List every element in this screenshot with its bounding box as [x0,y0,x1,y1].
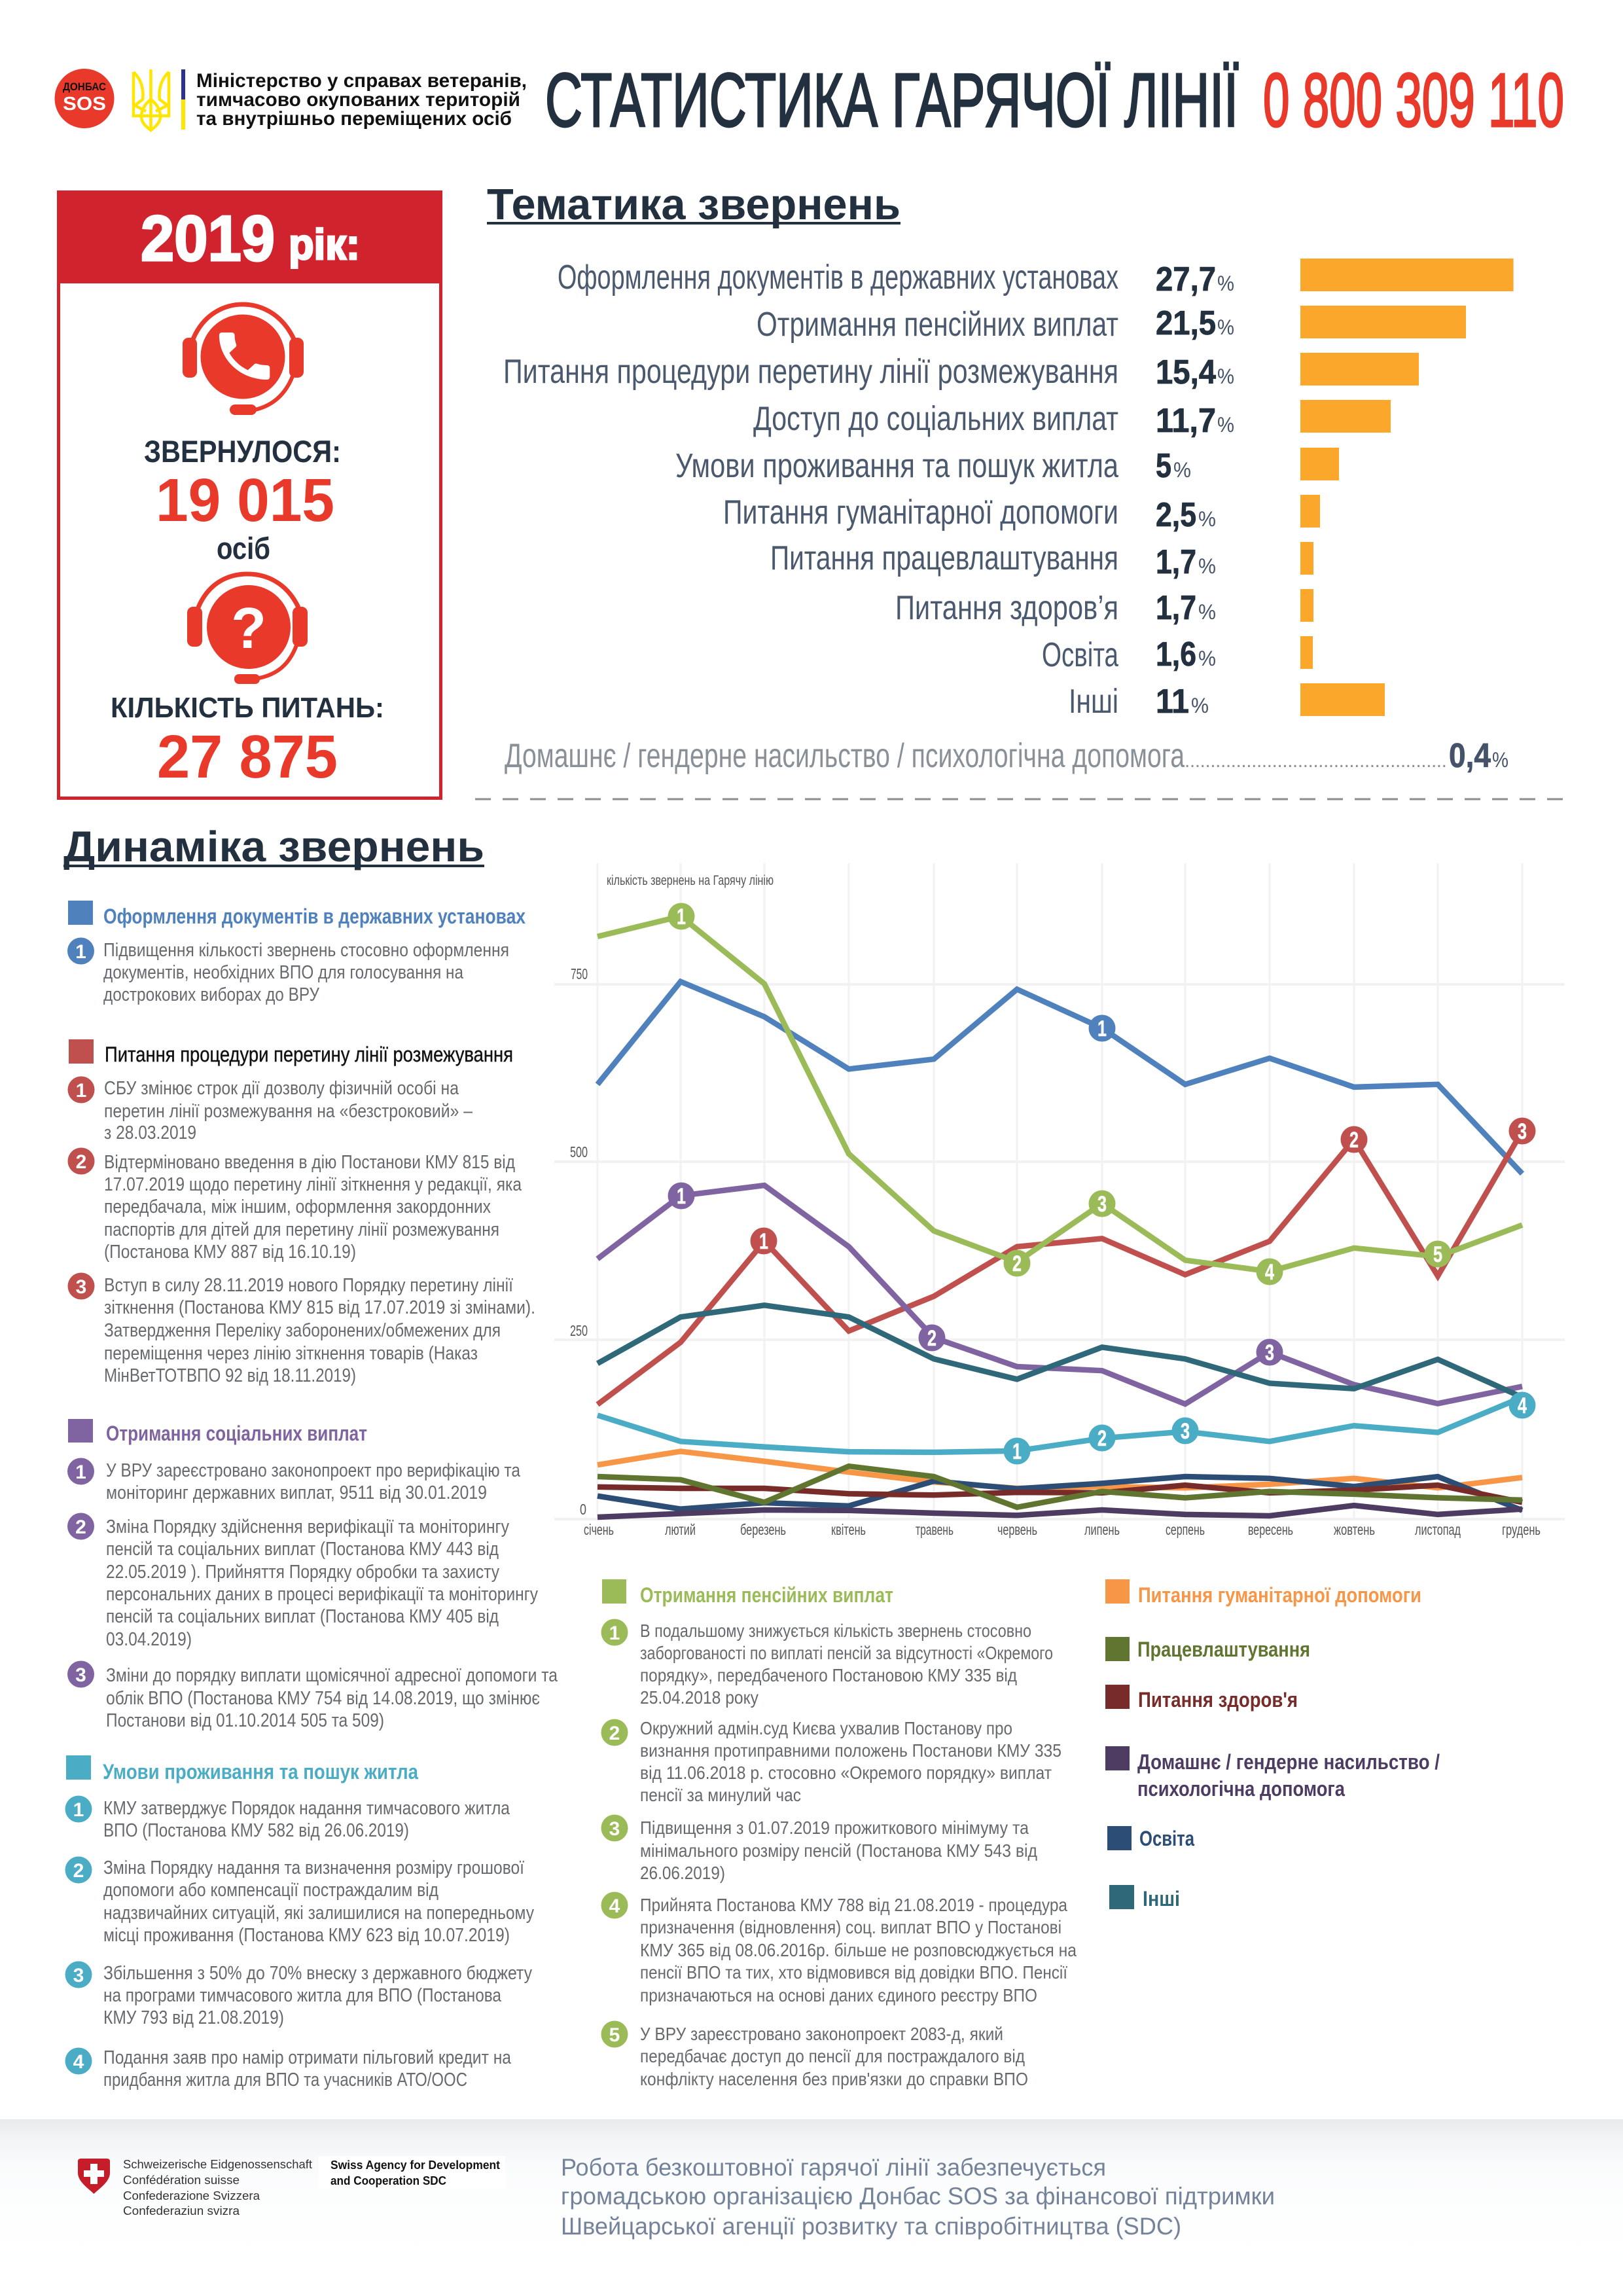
note 2: визнання протиправними положень Постанови КМУ 335 [640,1740,1061,1761]
funding note: Швейцарської агенції розвитку та співробітництва (SDC) [561,2213,1181,2240]
note 4: придбання житла для ВПО та учасників АТО/ООС [103,2070,467,2090]
number: questions: 27 875 [157,723,338,791]
chart markers: 4 [1265,1260,1274,1285]
panel: social payments [67,1419,558,1731]
legend item: health [1105,1685,1298,1712]
note 3 [601,1814,1037,1883]
domestic violence note: 0,4 [1449,737,1491,775]
row 1: % [1217,272,1234,295]
y axis labels: 500 [570,1143,588,1160]
row 2 [757,304,1466,344]
legend item: humanitarian [1105,1579,1421,1607]
row 2: 21,5 [1156,304,1216,342]
row 3: Питання процедури перетину лінії розмежування [503,353,1118,391]
chart markers: 3 [1181,1419,1190,1444]
note 3: мінімального розміру пенсій (Постанова КМУ 543 від [640,1840,1037,1861]
heading: social payments: Отримання соціальних виплат [106,1422,367,1445]
legend item: education [1107,1826,1194,1850]
row 6: % [1198,507,1216,531]
note 2: персональних даних в процесі верифікації та моніторингу [106,1584,538,1605]
icon: Ukrainian trident [134,69,169,130]
note 2: передбачала, між іншим, оформлення закордонних [104,1196,491,1217]
note 2: пенсій та соціальних виплат (Постанова КМУ 443 від [106,1539,499,1560]
ministry name [196,70,527,130]
row 6: 2,5 [1156,496,1196,534]
logo: Donbas SOS: SOS [63,94,106,115]
x axis labels: березень [740,1521,786,1538]
heading: documents: Оформлення документів в державних установах [103,905,526,928]
note 1: ВПО (Постанова КМУ 582 від 26.06.2019) [103,1820,409,1841]
note 1: 25.04.2018 року [640,1687,758,1708]
funding note: громадською організацією Донбас SOS за фінансової підтримки [561,2183,1275,2210]
legend square: crossing [69,1039,94,1064]
y axis labels [570,965,588,1518]
row 5: 5 [1156,447,1171,485]
legend square: documents [68,901,93,925]
note 2: надзвичайних ситуацій, які залишилися на попередньому [103,1903,534,1924]
panel: crossing the line [68,1039,535,1386]
bar chart: topics [503,259,1514,721]
Swiss Confederation text [123,2158,312,2217]
ministry name: Міністерство у справах ветеранів, [196,70,527,92]
note 4: пенсії ВПО та тих, хто відмовився від довідки ВПО. Пенсії [640,1962,1067,1982]
domestic violence note: Домашнє / гендерне насильство / психологічна допомога [505,737,1185,775]
note 1: дострокових виборах до ВРУ [103,984,319,1005]
note 2: Зміна Порядку надання та визначення розміру грошової [103,1857,524,1878]
row 9 [1042,636,1313,674]
number: people: 19 015 [156,466,334,534]
x axis labels: квітень [831,1521,866,1538]
note 2: Відтерміновано введення в дію Постанови КМУ 815 від [104,1152,515,1173]
legend square: social payments [68,1419,93,1443]
x axis labels: серпень [1166,1521,1205,1538]
note 2: Окружний адмін.суд Києва ухвалив Постанову про [640,1718,1012,1738]
y axis labels: 0 [580,1501,586,1518]
x axis labels: жовтень [1334,1521,1375,1538]
note 1: 1 [609,1623,620,1644]
chart markers: 3 [1518,1119,1527,1144]
y axis labels: 250 [570,1322,588,1339]
x axis labels: листопад [1415,1521,1461,1538]
icon: headset with phone [183,304,304,415]
note 4 [601,1892,1077,2005]
note 2: паспортів для дітей для перетину лінії розмежування [104,1219,499,1240]
header [55,58,1564,143]
footer [0,2119,1623,2270]
note 2: 2 [75,1516,86,1538]
legend square: housing [66,1755,91,1780]
note 4: 4 [609,1895,620,1917]
heading: dynamics: Динаміка звернень [63,822,484,870]
row 8: Питання здоров’я [895,589,1118,627]
note 2: 22.05.2019 ). Прийняття Порядку обробки та захисту [106,1562,499,1583]
note 5 [601,2021,1028,2089]
note 5: У ВРУ зареєстровано законопроект 2083-д, який [640,2024,1003,2044]
label: number of questions: КІЛЬКІСТЬ ПИТАНЬ: [111,692,384,724]
note 2: 03.04.2019) [106,1629,192,1650]
x axis labels: липень [1084,1521,1120,1538]
note 3 [65,1961,532,2028]
panel: topics of requests [487,180,1514,775]
x axis labels [584,1521,1541,1538]
note 1: В подальшому знижується кількість звернень стосовно [640,1621,1031,1641]
note 2: 2 [73,1860,84,1882]
note 4: Прийнята Постанова КМУ 788 від 21.08.2019 - процедура [640,1895,1067,1915]
legend item: education: Освіта [1139,1827,1194,1850]
note 1: 1 [76,1080,86,1102]
label: applied: ЗВЕРНУЛОСЯ: [144,434,341,469]
panel: pensions [601,1579,1077,2089]
row 10 [1069,683,1385,721]
note 1: порядку», передбаченого Постановою КМУ 335 від [640,1665,1017,1685]
panel: housing [65,1755,534,2090]
legend item: humanitarian: Питання гуманітарної допомоги [1138,1583,1421,1607]
note 3: Зміни до порядку виплати щомісячної адресної допомоги та [106,1665,558,1686]
domestic violence note: % [1492,748,1508,772]
chart markers: 5 [1433,1242,1442,1267]
note 3 [67,1661,558,1731]
label: persons: осіб [217,531,270,565]
note 2 [68,1148,522,1263]
line chart: monthly requests [554,863,1565,1538]
legend square: pensions [602,1579,626,1604]
legend item: other [1109,1885,1180,1910]
x axis labels: грудень [1502,1521,1541,1538]
row 4: Доступ до соціальних виплат [753,400,1118,438]
axis caption: кількість звернень на Гарячу лінію [607,873,774,888]
note 3: переміщення через лінію зіткнення товарів (Наказ [104,1343,478,1364]
row 2: Отримання пенсійних виплат [757,306,1118,344]
note 2: пенсії за минулий час [640,1785,801,1805]
note 3: на програми тимчасового житла для ВПО (Постанова [103,1985,502,2006]
note 2 [67,1513,538,1650]
logo: Donbas SOS: ДОНБАС [63,81,106,93]
ministry name: тимчасово окупованих територій [196,89,520,111]
Swiss Confederation text: Confederaziun svizra [123,2204,240,2217]
y axis labels: 750 [571,965,588,982]
note 3: 3 [76,1276,86,1298]
chart markers: 1 [1012,1439,1022,1464]
chart markers: 3 [1265,1340,1274,1365]
note 2: Зміна Порядку здійснення верифікації та моніторингу [106,1516,509,1537]
note 2: 2 [76,1151,86,1173]
funding note: Робота безкоштовної гарячої лінії забезпечується [561,2154,1106,2181]
legend item: domestic violence: Домашнє / гендерне насильство / [1137,1750,1440,1774]
Swiss Confederation text: Confédération suisse [123,2174,240,2187]
row 10: Інші [1069,683,1118,721]
ministry name colour bar [181,69,185,130]
note 1: моніторинг державних виплат, 9511 від 30.01.2019 [106,1482,487,1503]
chart markers: 2 [1097,1426,1107,1451]
chart markers [668,903,1535,1465]
x axis labels: вересень [1248,1521,1293,1538]
note 2: 17.07.2019 щодо перетину лінії зіткнення у редакції, яка [104,1174,522,1195]
SDC text: Swiss Agency for Development [330,2159,500,2172]
note 2: від 11.06.2018 р. стосовно «Окремого порядку» виплат [640,1763,1052,1783]
note 4: Подання заяв про намір отримати пільговий кредит на [103,2047,512,2068]
row 8 [895,589,1313,627]
note 1: Підвищення кількості звернень стосовно оформлення [103,940,509,961]
note 1: з 28.03.2019 [104,1122,196,1143]
note 3: МінВетТОТВПО 92 від 18.11.2019) [104,1365,356,1386]
heading: 2019 year: 2019 [141,202,275,274]
note 4: 4 [73,2051,84,2073]
heading: housing: Умови проживання та пошук житла [103,1760,418,1784]
note 4: призначення (відновлення) соц. виплат ВПО у Постанові [640,1917,1061,1937]
row 4: % [1217,413,1234,437]
row 9: 1,6 [1156,636,1196,673]
row 4 [753,400,1391,440]
x axis labels: лютий [665,1521,696,1538]
x axis labels: червень [997,1521,1037,1538]
panel: 2019 totals [57,190,442,798]
row 3: 15,4 [1156,353,1216,391]
row 8: % [1198,600,1216,624]
legend item: health: Питання здоров'я [1138,1688,1298,1712]
row 1: 27,7 [1156,260,1216,298]
chart markers: 1 [677,1184,686,1209]
ministry name: та внутрішньо переміщених осіб [196,108,512,130]
note 2 [601,1718,1061,1805]
note 3: 3 [73,1965,84,1986]
note 1: У ВРУ зареєстровано законопроект про верифікацію та [106,1460,521,1481]
note 2 [65,1856,534,1946]
Swiss Confederation text: Confederazione Svizzera [123,2189,260,2202]
note 5: передбачає доступ до пенсії для постраждалого від [640,2046,1025,2066]
chart markers: 2 [1349,1128,1359,1153]
note 1: документів, необхідних ВПО для голосування на [103,962,464,983]
note 1: заборгованості по виплаті пенсій за відсутності «Окремого [640,1643,1053,1663]
note 3: Підвищення з 01.07.2019 прожиткового мінімуму та [640,1818,1029,1838]
note 2: пенсій та соціальних виплат (Постанова КМУ 405 від [106,1606,499,1627]
note 4 [65,2047,512,2090]
data lines [597,916,1522,1517]
legend: other categories [1105,1579,1440,1910]
panel: documents [67,901,526,1005]
note 2: місці проживання (Постанова КМУ 623 від 10.07.2019) [103,1925,510,1946]
row 7: Питання працевлаштування [770,539,1118,577]
SDC text [330,2159,500,2187]
heading: topics: Тематика звернень [487,180,901,229]
row 5: % [1173,458,1191,482]
logo: Donbas SOS [55,69,114,128]
note 3: КМУ 793 від 21.08.2019) [103,2007,284,2028]
funding note [561,2154,1275,2240]
row 10: 11 [1156,683,1189,721]
note 3: 3 [609,1818,620,1840]
note 3: зіткнення (Постанова КМУ 815 від 17.07.2019 зі змінами). [104,1297,535,1318]
note 1: перетин лінії розмежування на «безстроковий» – [104,1101,473,1122]
chart grid [554,863,1565,1519]
row 3: % [1217,365,1234,388]
note 3: облік ВПО (Постанова КМУ 754 від 14.08.2019, що змінює [106,1688,540,1709]
note 5: 5 [609,2024,620,2046]
note 1 [67,1458,521,1503]
legend item: domestic violence: психологічна допомога [1137,1777,1345,1801]
note 1: 1 [73,1799,84,1821]
row 7: 1,7 [1156,543,1196,581]
heading: pensions: Отримання пенсійних виплат [640,1583,893,1607]
note 4: призначаються на основі даних єдиного реєстру ВПО [640,1985,1037,2005]
note 3: 3 [75,1664,86,1686]
note 1 [601,1619,1053,1708]
note 5: конфлікту населення без прив'язки до справки ВПО [640,2069,1028,2089]
SDC text: and Cooperation SDC [330,2174,446,2187]
note 3 [68,1272,535,1386]
note 2: 2 [609,1723,620,1744]
icon: headset with question mark [187,574,308,684]
icon: headset with question mark: ? [231,596,266,660]
note 3: Збільшення з 50% до 70% внеску з державного бюджету [103,1963,532,1984]
row 5: Умови проживання та пошук житла [675,447,1118,485]
row 10: % [1191,694,1209,717]
legend item: other: Інші [1143,1887,1180,1910]
note 1: 1 [75,941,86,963]
note 2: (Постанова КМУ 887 від 16.10.19) [104,1242,356,1263]
chart markers: 1 [1097,1016,1107,1041]
row 9: % [1198,647,1216,670]
note 3: 26.06.2019) [640,1863,725,1883]
chart markers: 1 [759,1229,768,1254]
icon: Swiss shield [78,2159,110,2194]
chart markers: 2 [1012,1251,1022,1276]
note 1 [65,1796,510,1841]
row 7: % [1198,554,1216,578]
legend item: employment: Працевлаштування [1137,1638,1310,1661]
heading: crossing: Питання процедури перетину лінії розмежування [105,1043,513,1066]
row 8: 1,7 [1156,589,1196,627]
note 1 [68,1076,473,1143]
chart markers: 1 [677,905,686,929]
x axis labels: травень [916,1521,954,1538]
row 6: Питання гуманітарної допомоги [723,493,1118,531]
note 3: Затвердження Переліку заборонених/обмежених для [104,1320,501,1341]
note 1: 1 [75,1462,86,1483]
note 4: КМУ 365 від 08.06.2016р. більше не розповсюджується на [640,1940,1077,1960]
note 3: Вступ в силу 28.11.2019 нового Порядку перетину лінії [104,1275,513,1296]
chart markers: 4 [1518,1393,1527,1418]
note 1: СБУ змінює строк дії дозволу фізичній особі на [104,1078,459,1099]
row 1: Оформлення документів в державних установах [558,259,1118,296]
title: СТАТИСТИКА ГАРЯЧОЇ ЛІНІЇ [545,58,1238,143]
Swiss Confederation text: Schweizerische Eidgenossenschaft [123,2158,312,2171]
note 3: Постанови від 01.10.2014 505 та 509) [106,1710,384,1731]
x axis labels: січень [584,1521,614,1538]
heading: 2019 year: рік: [289,220,360,268]
row 9: Освіта [1042,636,1118,674]
note 1: КМУ затверджує Порядок надання тимчасового житла [103,1798,510,1819]
chart markers: 2 [927,1326,936,1351]
row 2: % [1217,315,1234,339]
note 2: допомоги або компенсації постраждалим від [103,1880,438,1901]
chart markers: 3 [1097,1192,1107,1217]
row 4: 11,7 [1156,402,1216,440]
domestic violence note: ................................................... [1185,750,1447,772]
note 1 [67,937,509,1005]
legend item: domestic violence [1105,1746,1440,1801]
heading: 2019 year [141,202,360,274]
